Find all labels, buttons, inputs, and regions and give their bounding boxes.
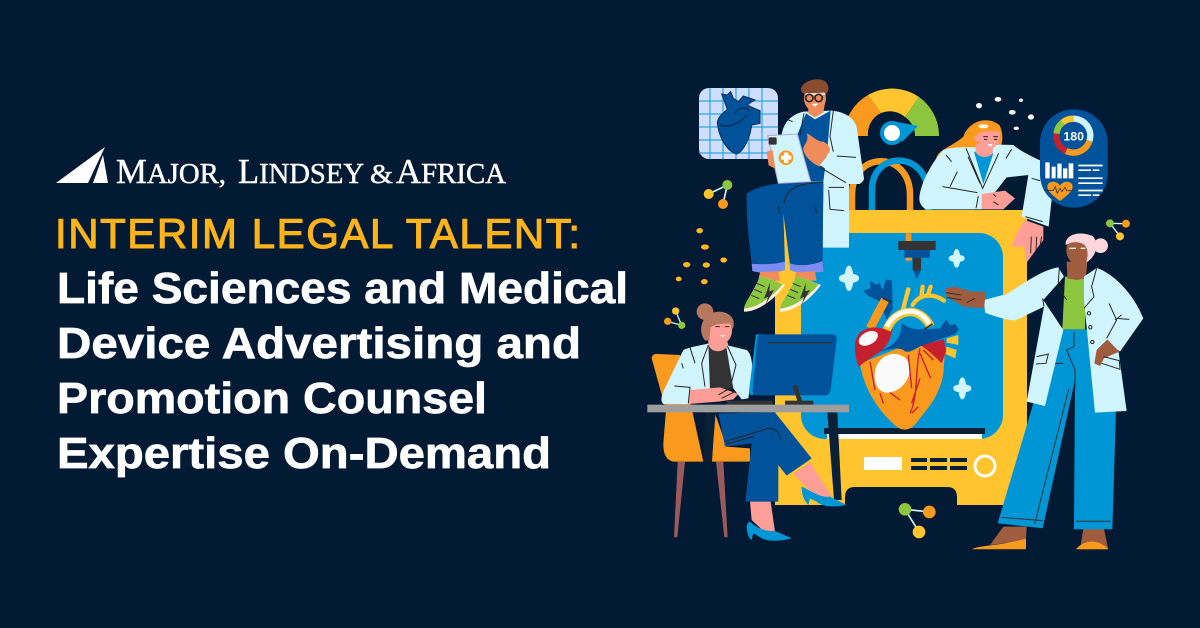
character: standing woman: [945, 234, 1143, 549]
computer monitor: [727, 334, 837, 405]
chair: [652, 354, 750, 537]
heading: main title: Promotion Counsel: [57, 374, 487, 423]
desk top: [647, 405, 849, 412]
top and coat: [661, 343, 752, 404]
aortic arch: [887, 311, 933, 330]
anatomical heart and nozzle: [839, 233, 971, 430]
trousers: [747, 182, 823, 266]
cuffs: [752, 261, 823, 273]
shirt: [797, 111, 831, 182]
dark blue vessels: [880, 319, 959, 352]
trousers: [718, 412, 812, 502]
icon: logo sails: [56, 147, 108, 183]
heading: eyebrow: INTERIM LEGAL TALENT:: [55, 210, 580, 257]
text lines: [1078, 165, 1103, 196]
lab coat: [919, 145, 1052, 227]
second leg: [793, 462, 833, 497]
heading: main title: Device Advertising and: [57, 319, 581, 368]
red atria: [855, 327, 946, 367]
hands and sleeve: [767, 133, 864, 184]
printer controls: [864, 456, 995, 476]
shoes: [972, 539, 1108, 549]
hands: [982, 191, 1043, 263]
red veins: [870, 348, 933, 413]
head: [697, 303, 734, 351]
tablet: [768, 134, 811, 183]
heart pulse: [1044, 182, 1075, 201]
trousers: [998, 329, 1116, 529]
heart body: [860, 345, 945, 430]
decorative yellow dots: [676, 228, 727, 284]
coat lines: [943, 148, 1043, 253]
head: [801, 79, 828, 117]
desk legs: [703, 412, 842, 500]
blue top: [974, 152, 993, 184]
heart vessels back: [863, 279, 958, 358]
logo wordmark: MAJOR,: [116, 152, 226, 191]
heading: main title: Expertise On-Demand: [57, 429, 551, 478]
heading: main title: [57, 264, 628, 478]
character: woman at desk: [647, 303, 849, 541]
hand on hip: [1094, 339, 1119, 366]
printer handles: [852, 161, 928, 212]
logo wordmark: AFRICA: [396, 152, 506, 191]
lab coat: [782, 111, 864, 248]
logo wordmark: LINDSEY: [238, 152, 364, 191]
character: seated man with tablet: [744, 79, 864, 312]
molecule: top left: [704, 180, 732, 209]
ankles: [758, 271, 817, 281]
molecule: left of desk: [664, 307, 685, 329]
dashboard card: [1040, 109, 1108, 208]
score: 180: [1063, 129, 1084, 143]
sneakers: [744, 276, 821, 312]
donut chart: [1056, 119, 1090, 153]
face: [974, 122, 1001, 157]
hair: [936, 120, 1002, 161]
logo: Major, Lindsey & Africa: [56, 147, 506, 191]
feet: [990, 527, 1108, 549]
coat lines and buttons: [1036, 268, 1129, 369]
logo wordmark: [116, 152, 506, 191]
3D printer body: [775, 210, 1027, 505]
sparkles: [839, 249, 971, 399]
green top: [1062, 277, 1086, 329]
printer nozzle: [898, 233, 936, 279]
character: woman leaning on printer: [919, 109, 1108, 263]
lab coat: [984, 267, 1143, 413]
calf: [750, 502, 775, 532]
coat lines: [778, 111, 856, 213]
neck and head: [1066, 234, 1108, 280]
logo wordmark: &: [370, 159, 393, 189]
heels: [747, 487, 847, 541]
gauge: [844, 89, 939, 145]
pointing hand: [945, 287, 986, 308]
white highlights: [856, 328, 910, 393]
decorative white dots: [976, 97, 1034, 130]
illustration: [647, 79, 1143, 549]
molecule: bottom: [899, 503, 936, 538]
icon: heart scan panel: [699, 88, 778, 159]
bar chart: [1045, 162, 1073, 178]
molecule: top right: [1106, 219, 1130, 240]
heading: main title: Life Sciences and Medical: [57, 264, 628, 313]
